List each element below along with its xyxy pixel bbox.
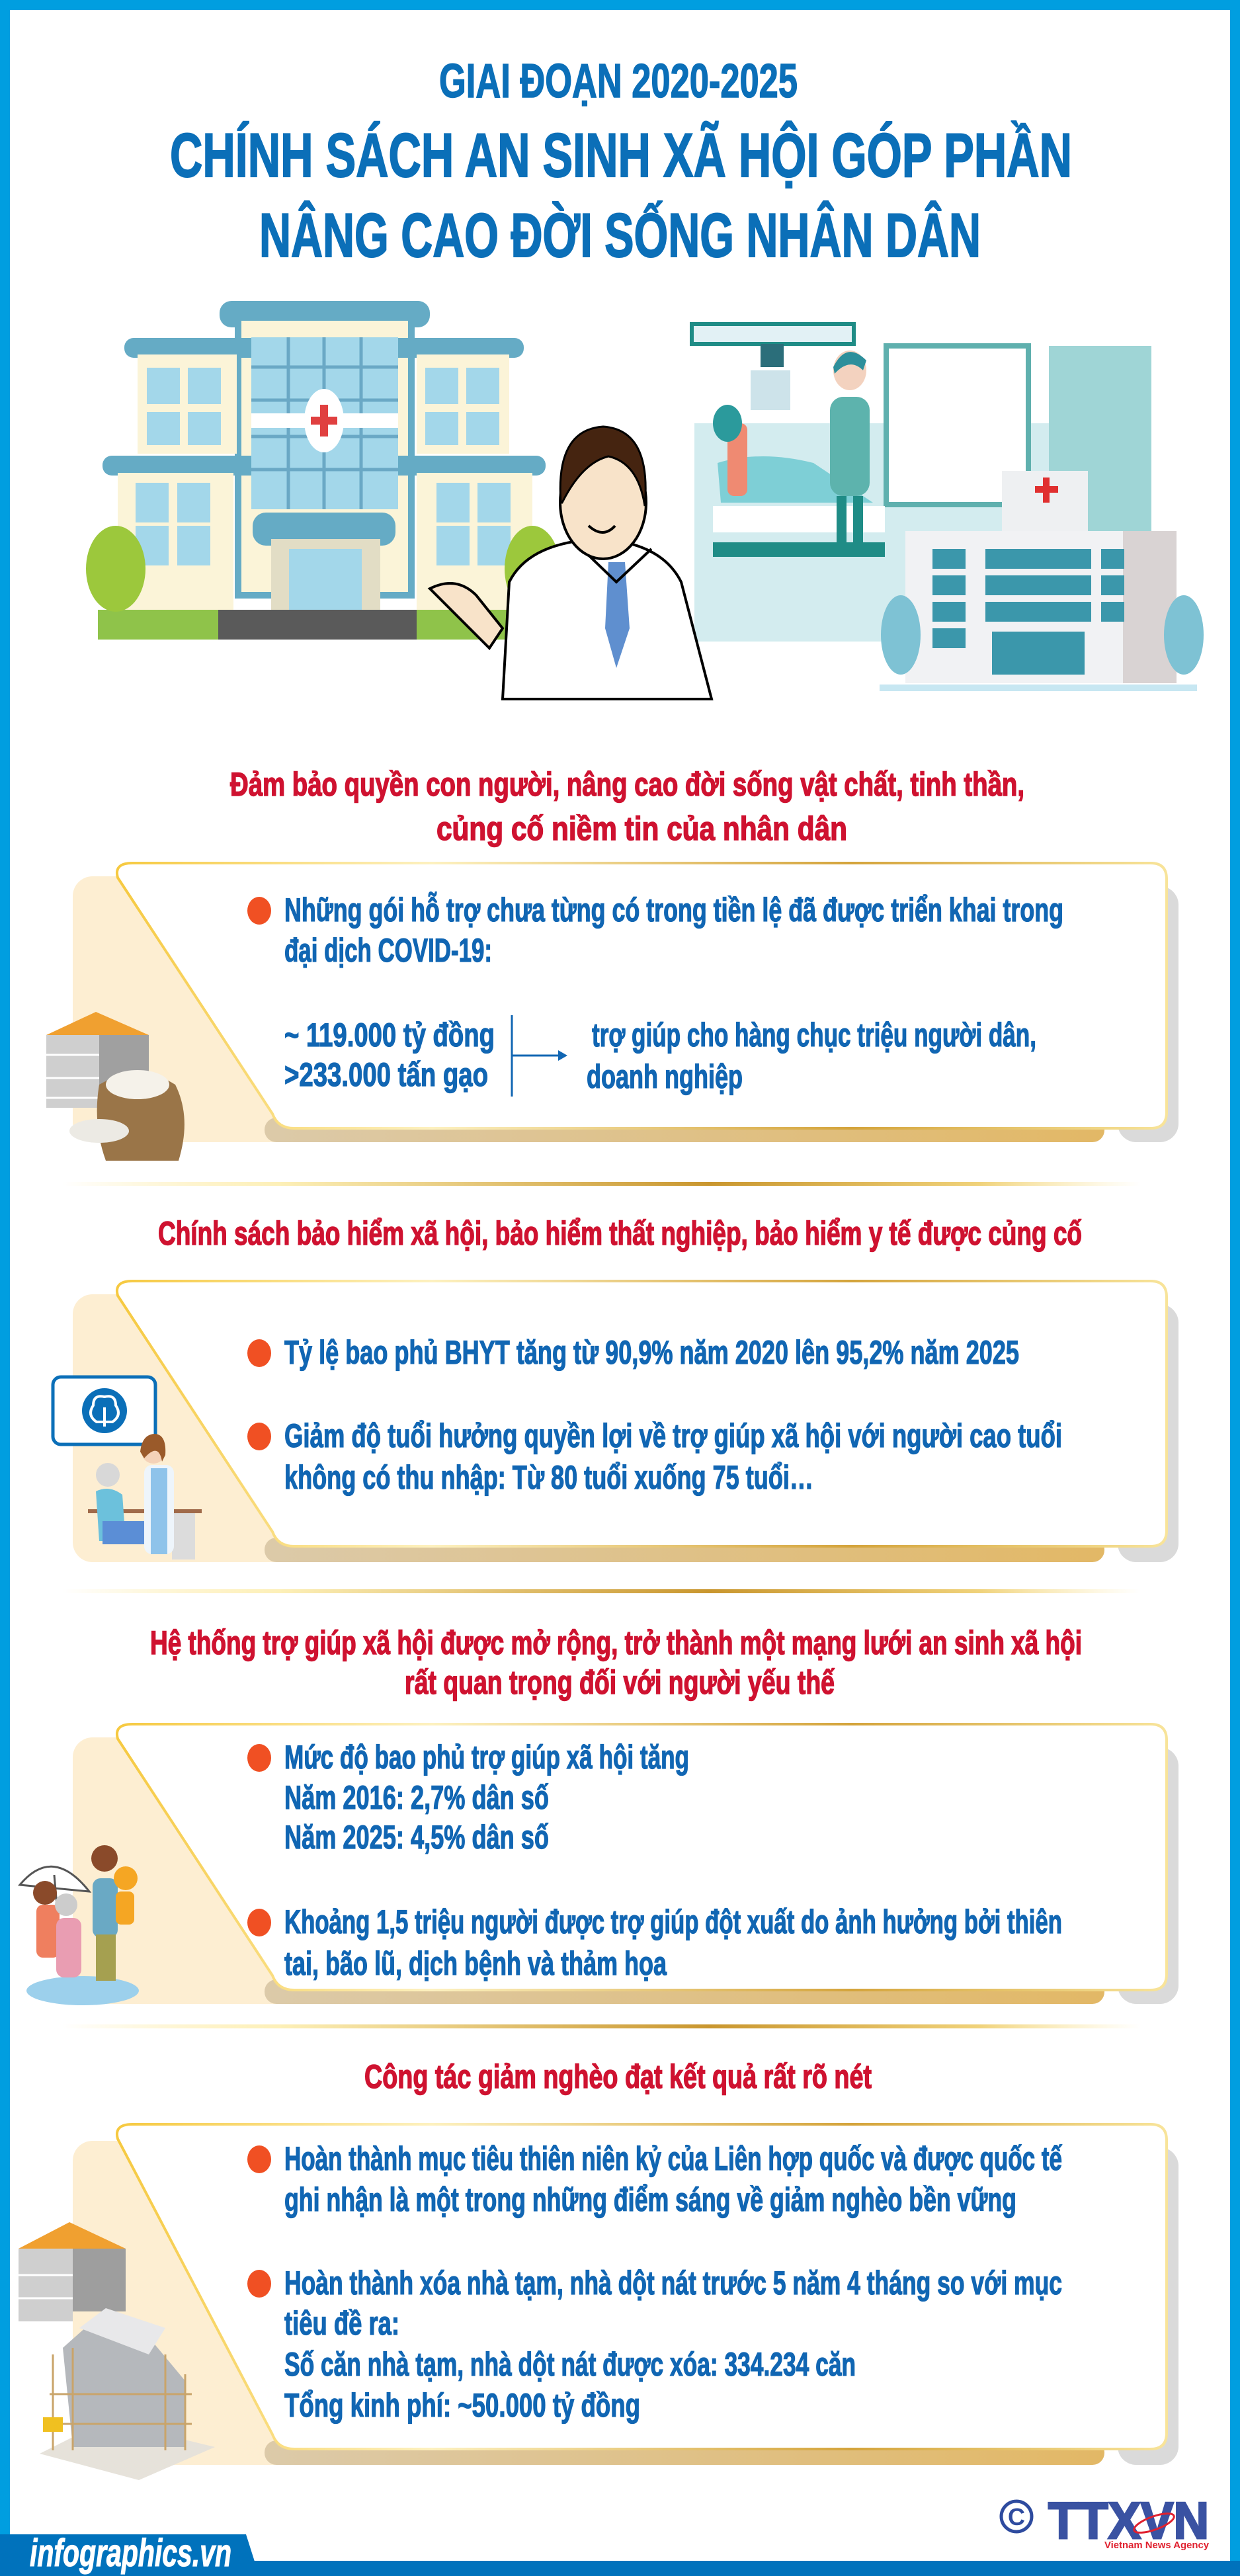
result text: trợ giúp cho hàng chục triệu người dân,: [592, 1017, 1036, 1054]
panel: card 3 social assistance: [20, 1724, 1178, 2005]
room scene background: [692, 324, 1151, 644]
icon: social insurance logo: [53, 1377, 155, 1444]
bullet: emergency aid: tai, bão lũ, dịch bệnh và thảm họa: [284, 1945, 667, 1982]
figures: ~ 119.000 tỷ đồng: [284, 1017, 495, 1054]
figures: [284, 1017, 495, 1093]
bullet: COVID packages: đại dịch COVID-19:: [284, 932, 492, 969]
panel: card 1 COVID support: [46, 863, 1178, 1161]
bullet: emergency aid: [247, 1903, 1062, 1982]
logo: TTXVN: TTXVN: [1048, 2491, 1209, 2550]
bullet: housing: Tổng kinh phí: ~50.000 tỷ đồng: [284, 2387, 640, 2424]
doctor: [430, 427, 712, 699]
result text: doanh nghiệp: [587, 1058, 743, 1095]
bullet: housing: Số căn nhà tạm, nhà dột nát được xóa: 334.234 căn: [284, 2346, 856, 2383]
section heading 3: rất quan trọng đối với người yếu thế: [405, 1664, 835, 1701]
left hospital building: [86, 301, 560, 640]
result text: [587, 1017, 1036, 1095]
arrow: [512, 1015, 567, 1097]
panel: card 2 insurance: [53, 1281, 1178, 1562]
bullet: coverage increase: Năm 2025: 4,5% dân số: [284, 1819, 549, 1856]
logo: TTXVN: C: [1008, 2503, 1025, 2530]
title: [170, 55, 1072, 270]
bullet: UN goals: [247, 2140, 1062, 2218]
footer bar: [0, 2532, 1240, 2576]
panel: card 4 poverty reduction: [19, 2124, 1178, 2480]
right hospital building: [880, 471, 1204, 691]
footer bar: infographics.vn: [30, 2532, 231, 2575]
bullet: housing: tiêu đề ra:: [284, 2305, 399, 2342]
figures: >233.000 tấn gạo: [284, 1056, 488, 1093]
bullet: coverage increase: Mức độ bao phủ trợ giúp xã hội tăng: [284, 1739, 689, 1776]
title: GIAI ĐOẠN 2020-2025: [439, 55, 798, 108]
bullet: age reduction: không có thu nhập: Từ 80 tuổi xuống 75 tuổi…: [284, 1459, 813, 1496]
section heading 1: củng cố niềm tin của nhân dân: [436, 810, 847, 847]
icon: money stack and house: [19, 2222, 215, 2480]
illustration: hospital scene: [86, 301, 1204, 699]
bullet: housing: [247, 2264, 1062, 2424]
section heading 1: [230, 766, 1024, 847]
bullet: coverage increase: Năm 2016: 2,7% dân số: [284, 1779, 549, 1816]
icon: money and rice: [46, 1012, 185, 1161]
icon: doctor with elderly patient: [88, 1434, 202, 1559]
bullet: COVID packages: [247, 892, 1063, 969]
section heading 3: [150, 1624, 1082, 1701]
bullet: coverage increase: [247, 1739, 689, 1856]
logo: TTXVN: Vietnam News Agency: [1104, 2540, 1210, 2551]
icon: people in rain: [20, 1845, 139, 2005]
bullet: age reduction: [247, 1417, 1062, 1496]
section heading 1: Đảm bảo quyền con người, nâng cao đời sống vật chất, tinh thần,: [230, 766, 1024, 803]
section heading 4: Công tác giảm nghèo đạt kết quả rất rõ nét: [364, 2058, 872, 2095]
